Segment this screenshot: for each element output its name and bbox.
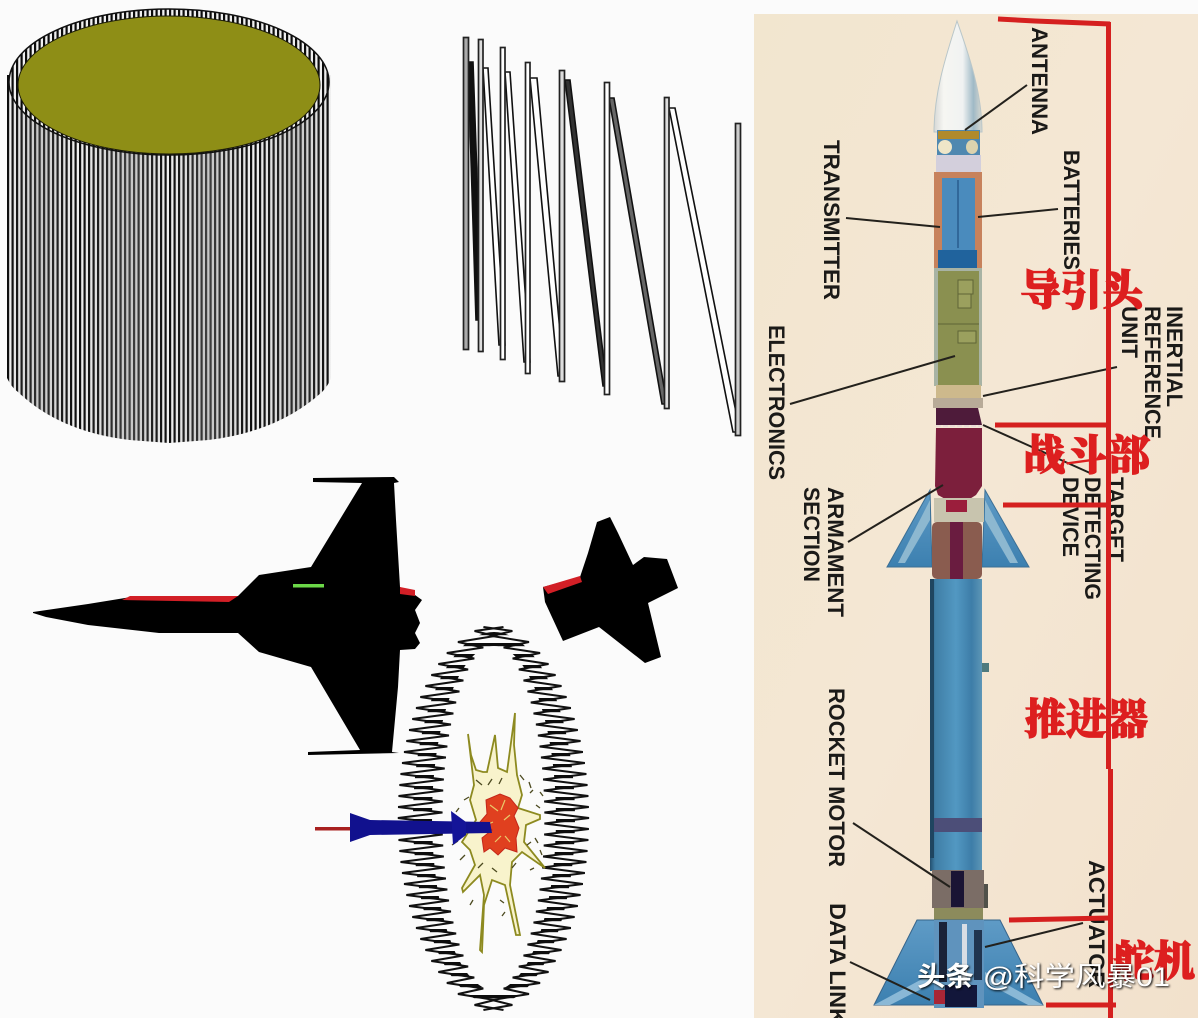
red edge highlight, tail — [400, 587, 415, 596]
ring: right zigzag — [483, 627, 589, 1010]
section label: seeker: 导引头 — [1020, 267, 1148, 314]
rotated part labels — [764, 27, 1187, 1018]
red fireball — [480, 794, 519, 855]
antenna section — [937, 130, 980, 155]
dashed divider — [936, 425, 982, 427]
ring: thick strokes along band centre — [413, 632, 575, 1004]
section label: warhead: 战斗部 — [1023, 432, 1150, 479]
severed jet tail section — [543, 517, 678, 663]
watermark — [917, 962, 1170, 992]
small fitting — [982, 663, 989, 672]
expanding fragment ring — [398, 627, 589, 1010]
label: actuator: ACTUATOR — [1084, 860, 1109, 988]
rear body interior — [934, 920, 984, 1008]
brown grain section — [932, 522, 982, 579]
label: unit: UNIT — [1117, 306, 1142, 359]
watermark: @科学风暴01 — [983, 962, 1170, 992]
mid bay — [934, 498, 984, 522]
motor band — [934, 818, 982, 832]
rocket motor tube — [930, 579, 982, 871]
electronics section — [934, 268, 982, 386]
section label: propulsion: 推进器 — [1025, 696, 1148, 743]
label: rocket motor: ROCKET MOTOR — [824, 688, 849, 867]
red edge highlight, nose — [122, 596, 238, 602]
yellow shards — [462, 713, 545, 952]
label: detecting: DETECTING — [1080, 477, 1105, 600]
label: data link: DATA LINK — [825, 903, 850, 1018]
transmitter sleeve — [934, 172, 982, 268]
leader lines — [790, 85, 1117, 1000]
fireball streaks — [486, 800, 510, 842]
label: device: DEVICE — [1058, 477, 1083, 557]
label: reference: REFERENCE — [1140, 306, 1165, 439]
cylinder body with vertical rods — [7, 75, 331, 443]
label: section: SECTION — [799, 487, 824, 582]
pale housing — [936, 155, 981, 178]
label: electronics: ELECTRONICS — [764, 325, 789, 480]
armament section — [935, 428, 982, 500]
label: target: TARGET — [1103, 477, 1128, 563]
red exhaust tail — [315, 827, 351, 830]
nose cone — [934, 21, 982, 132]
forward fin — [451, 811, 466, 845]
label: inertial: INERTIAL — [1162, 306, 1187, 407]
batteries — [942, 178, 975, 250]
scattered debris — [452, 775, 543, 916]
red section brackets — [995, 19, 1116, 1018]
cylinder fragment warhead illustration — [7, 9, 331, 443]
rear nozzle section — [932, 870, 984, 908]
dark rail — [930, 579, 934, 858]
cylinder top rim — [9, 9, 329, 155]
watermark: 头条 — [917, 962, 974, 992]
unfolded rods sequence — [464, 38, 740, 436]
inertial reference section — [933, 398, 983, 408]
label: batteries: BATTERIES — [1059, 150, 1084, 270]
rear fins — [874, 920, 1043, 1005]
blue missile body — [350, 813, 492, 842]
tan section — [936, 385, 981, 398]
label: antenna: ANTENNA — [1027, 27, 1052, 135]
label: armament: ARMAMENT — [823, 487, 848, 618]
interceptor missile — [315, 811, 492, 845]
explosion burst — [452, 713, 545, 952]
label: transmitter: TRANSMITTER — [819, 140, 844, 300]
forward fins — [887, 490, 1029, 567]
dark blue bulkhead — [938, 250, 977, 268]
olive band — [934, 908, 983, 920]
green cockpit mark — [293, 584, 324, 588]
section label: actuator: 舵机 — [1113, 938, 1195, 985]
red edge highlight — [543, 576, 582, 594]
cutaway missile drawing — [874, 21, 1043, 1008]
olive top face — [18, 16, 320, 154]
vertical rods — [464, 38, 740, 436]
missile cutaway panel — [754, 14, 1198, 1018]
dark forward warhead — [936, 408, 982, 425]
diagonal rod traces — [468, 62, 740, 432]
fighter jet, forward part — [33, 477, 422, 755]
ring: left zigzag — [398, 627, 504, 1010]
